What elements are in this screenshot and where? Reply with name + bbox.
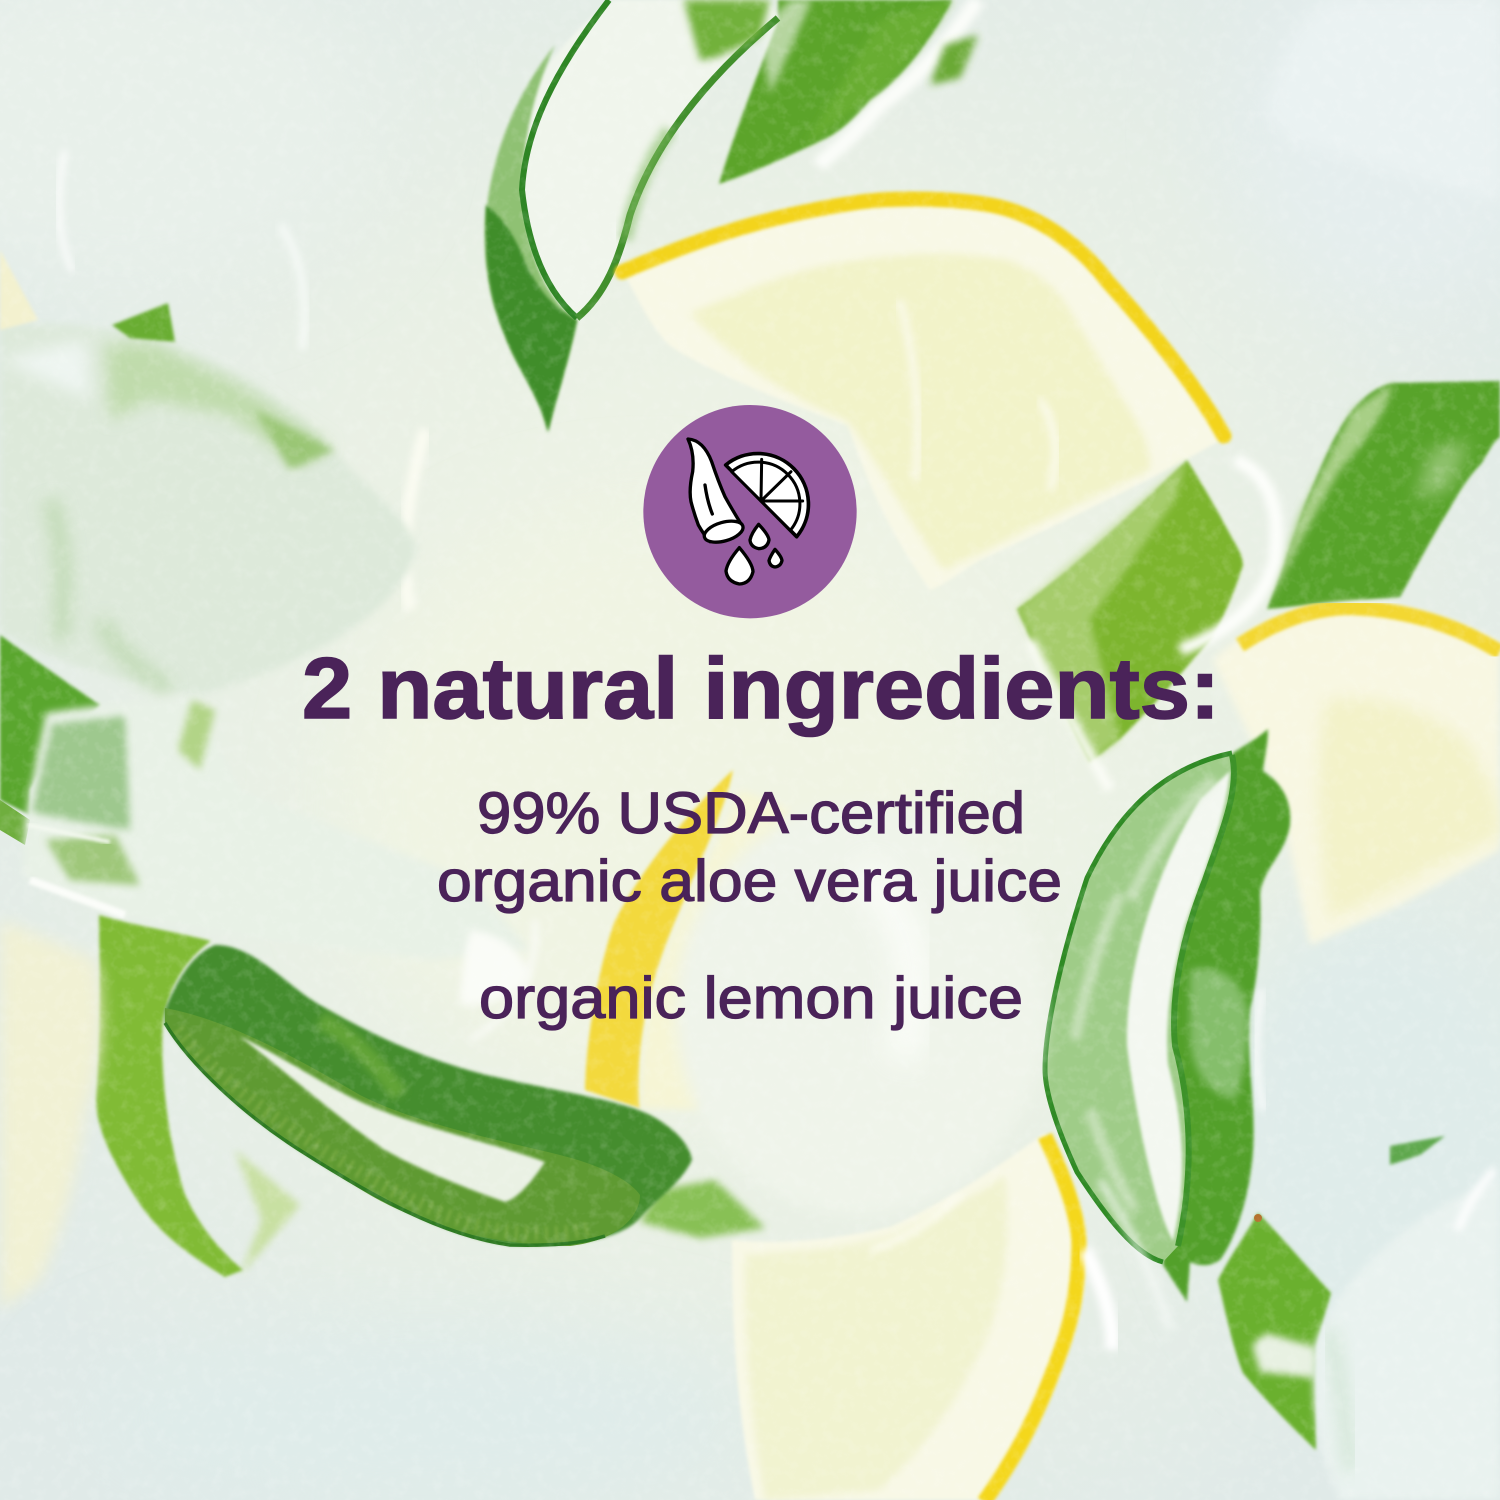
right aloe leaf piece [1267, 381, 1500, 609]
bottom lemon slice [732, 1133, 1086, 1500]
centre lemon rind [585, 770, 790, 1110]
icon: juice drops [726, 524, 782, 584]
bottom right ice block [1313, 1170, 1500, 1500]
ingredient text: aloe vera juice: organic aloe vera juice [437, 849, 1062, 914]
lemon rind arc [622, 199, 1224, 436]
bottom right aloe piece [1218, 1213, 1331, 1450]
ingredient text: aloe vera juice: 99% USDA-certified [477, 781, 1025, 846]
right edge highlights [1085, 990, 1445, 1350]
lemon rind arc [984, 1136, 1079, 1500]
icon: lemon slice [726, 454, 808, 537]
icon: aloe leaf [688, 439, 745, 546]
top aloe slice [485, 0, 778, 432]
centre right aloe leaf piece [1017, 460, 1277, 790]
ingredient text: lemon juice: organic lemon juice [479, 966, 1023, 1031]
top lemon slice [622, 197, 1228, 590]
centre pale ice disc [675, 805, 1045, 1215]
badge circle [643, 405, 857, 618]
left front ice block [23, 698, 535, 1040]
top right aloe leaf piece [719, 0, 978, 184]
left ice cube [0, 250, 417, 695]
right aloe slice [1045, 729, 1290, 1302]
right lemon slice [1213, 602, 1500, 945]
left lemon hint [0, 920, 101, 1310]
icon badge: aloe, lemon and drops [643, 405, 857, 618]
ingredient text: aloe vera juice [437, 781, 1062, 914]
bottom left aloe slice [165, 945, 765, 1246]
heading: 2 natural ingredients: [302, 641, 1220, 737]
left aloe stem [0, 635, 300, 1277]
